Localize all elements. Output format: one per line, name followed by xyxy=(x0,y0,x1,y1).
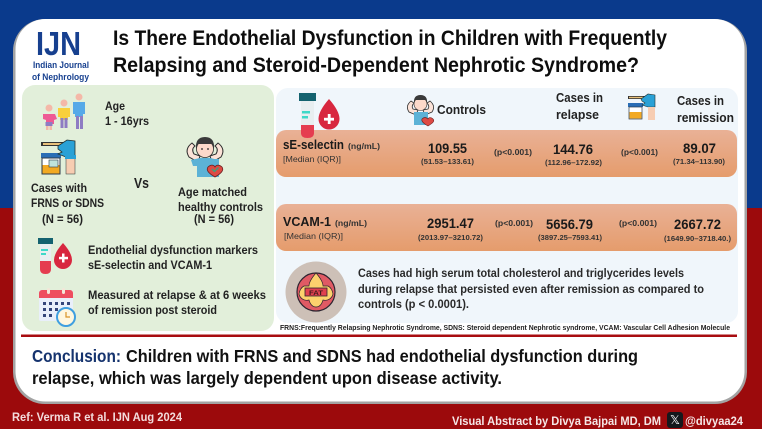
text: timing xyxy=(88,290,266,317)
row: sE-selectin: [Median (IQR)] xyxy=(283,154,341,164)
icon: urine test xyxy=(41,140,76,174)
panel: results xyxy=(276,88,738,323)
label: cases in relapse xyxy=(556,91,603,122)
text: cases: (N = 56) xyxy=(42,214,83,226)
text: controls xyxy=(178,187,263,226)
text: timing: of remission post steroid xyxy=(88,305,217,317)
row: sE-selectin: (51.53–133.61) xyxy=(421,159,474,166)
text: markers xyxy=(88,245,258,272)
credit: Visual Abstract by Divya Bajpai MD, DM xyxy=(452,416,661,428)
row: sE-selectin: (p<0.001) xyxy=(494,147,532,157)
text: controls: (N = 56) xyxy=(194,214,234,226)
logo: Indian Journal of Nephrology: IJN xyxy=(36,25,81,62)
title xyxy=(113,26,667,77)
row: VCAM-1: (2013.97–3210.72) xyxy=(418,235,483,242)
row: VCAM-1: (p<0.001) xyxy=(619,218,657,228)
label: cases in remission: remission xyxy=(677,111,734,125)
reference: Ref: Verma R et al. IJN Aug 2024 xyxy=(12,412,183,424)
icon: fat xyxy=(286,262,346,322)
row: sE-selectin: sE-selectin xyxy=(283,137,344,152)
icon: X logo xyxy=(667,412,683,428)
label: controls: Controls xyxy=(437,103,486,117)
row: VCAM-1: (1649.90–3718.40.) xyxy=(664,236,731,243)
row: sE-selectin: 89.07 xyxy=(683,141,716,156)
icon: blood tube and drop xyxy=(38,238,72,274)
row: VCAM-1: (ng/mL) xyxy=(335,218,367,228)
row: sE-selectin: 109.55 xyxy=(428,141,467,156)
row: VCAM-1: 2667.72 xyxy=(674,217,721,232)
conclusion: Children with FRNS and SDNS had endothelial dysfunction during xyxy=(126,346,638,366)
logo: Indian Journal of Nephrology: Indian Journal xyxy=(33,60,89,70)
row: sE-selectin: (p<0.001) xyxy=(621,147,658,157)
logo: Indian Journal of Nephrology: of Nephrology xyxy=(32,72,89,82)
text: age: Age xyxy=(105,101,125,113)
text: controls: healthy controls xyxy=(178,202,263,214)
credit: @divyaa24 xyxy=(685,416,744,428)
text: cases: Cases with xyxy=(31,183,87,195)
text: lipid finding: Cases had high serum total cholesterol and triglycerides levels xyxy=(358,266,684,280)
row: VCAM-1: [Median (IQR)] xyxy=(284,231,343,241)
row: VCAM-1 xyxy=(276,204,737,251)
text: markers: sE-selectin and VCAM-1 xyxy=(88,260,213,272)
text: cases: FRNS or SDNS xyxy=(31,198,104,210)
text: timing: Measured at relapse & at 6 weeks xyxy=(88,290,266,302)
panel: study population xyxy=(22,85,274,331)
label: cases in relapse: Cases in xyxy=(556,91,603,105)
row: VCAM-1: 2951.47 xyxy=(427,216,474,231)
icon: healthy boy, header xyxy=(407,95,434,126)
icon: calendar and clock xyxy=(39,288,75,326)
label: cases in remission: Cases in xyxy=(677,94,724,108)
row: sE-selectin: (71.34–113.90) xyxy=(673,159,725,166)
text: versus: Vs xyxy=(134,175,149,192)
icon: X logo: 𝕏 xyxy=(670,413,680,427)
text: age xyxy=(105,101,149,128)
icon: blood tube and drop, header xyxy=(299,93,340,138)
row: VCAM-1: (3897.25–7593.41) xyxy=(538,235,602,242)
title: Is There Endothelial Dysfunction in Children with Frequently xyxy=(113,26,667,50)
icon: family xyxy=(43,94,85,130)
conclusion: Conclusion: xyxy=(32,346,121,366)
title: Relapsing and Steroid-Dependent Nephrotic Syndrome? xyxy=(113,53,639,77)
text: age: 1 - 16yrs xyxy=(105,116,149,128)
row: sE-selectin: 144.76 xyxy=(553,142,593,157)
text: markers: Endothelial dysfunction markers xyxy=(88,245,258,257)
text: lipid finding: controls (p < 0.0001). xyxy=(358,297,469,311)
icon: healthy boy xyxy=(187,137,223,177)
text: controls: Age matched xyxy=(178,187,247,199)
icon: fat: FAT xyxy=(309,290,323,297)
label: cases in relapse: relapse xyxy=(556,108,599,122)
row: sE-selectin: (ng/mL) xyxy=(348,141,380,151)
conclusion: relapse, which was largely dependent upon disease activity. xyxy=(32,368,502,388)
text: cases xyxy=(31,183,104,226)
conclusion xyxy=(32,346,638,388)
credit xyxy=(452,412,744,428)
row: VCAM-1: VCAM-1 xyxy=(283,214,331,229)
row: sE-selectin xyxy=(276,130,737,177)
label: cases in remission xyxy=(677,94,734,125)
row: VCAM-1: (p<0.001) xyxy=(495,218,533,228)
logo: Indian Journal of Nephrology xyxy=(32,25,89,82)
row: VCAM-1: 5656.79 xyxy=(546,217,593,232)
text: lipid finding xyxy=(358,266,704,311)
footnote: abbreviations: FRNS:Frequently Relapsing Nephrotic Syndrome, SDNS: Steroid dependent Nephrotic syndrome, VCAM: Vascular Cell Adhesion Molecule xyxy=(280,325,730,332)
row: sE-selectin: (112.96–172.92) xyxy=(545,160,602,167)
text: lipid finding: during relapse that persisted even after remission as compared to xyxy=(358,282,704,296)
icon: urine test, header xyxy=(628,94,655,120)
